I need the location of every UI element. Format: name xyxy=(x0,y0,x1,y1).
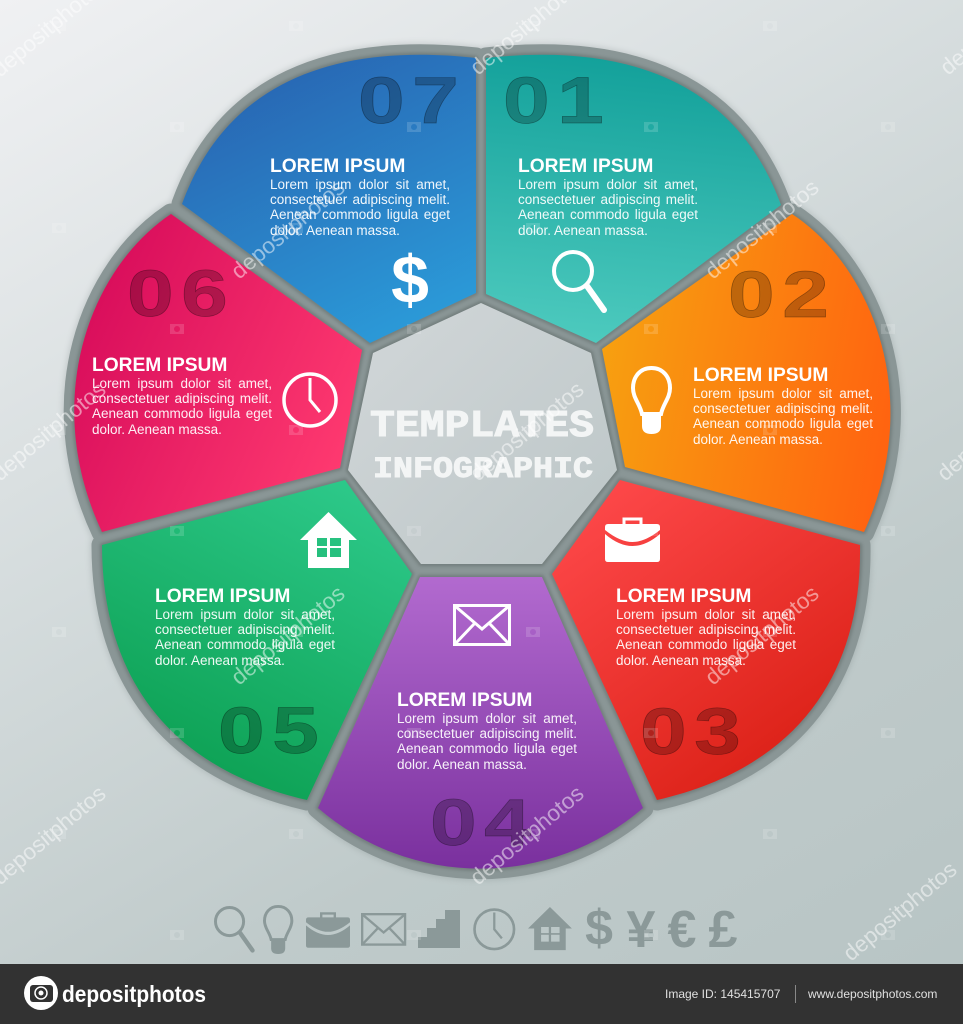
footer bar xyxy=(0,964,963,1024)
text block 07: consectetuer adipiscing melit. xyxy=(270,192,450,207)
text block 01: LOREM IPSUM xyxy=(518,156,653,177)
text block 03: Lorem ipsum dolor sit amet, xyxy=(616,607,796,622)
text block 02: Lorem ipsum dolor sit amet, xyxy=(693,386,873,401)
image id: Image ID: 145415707 xyxy=(665,987,781,1001)
text block 06: dolor. Aenean massa. xyxy=(92,422,222,437)
panel: centre heptagon with title xyxy=(348,303,617,564)
currency icons: £ xyxy=(709,901,738,959)
logo wordmark: depositphotos xyxy=(62,981,206,1007)
watermarks: depositphotos xyxy=(838,857,962,966)
currency icons: € xyxy=(668,901,696,959)
icon: briefcase xyxy=(605,519,660,562)
icon: light bulb xyxy=(633,368,670,434)
text block 02: Aenean commodo ligula eget xyxy=(693,416,873,431)
text block 01 xyxy=(518,156,698,238)
icon: stairs grey xyxy=(418,910,460,948)
icon: clock xyxy=(284,374,336,426)
icon: dollar: $ xyxy=(391,242,429,318)
text block 01: Lorem ipsum dolor sit amet, xyxy=(518,177,698,192)
watermarks: depositphotos xyxy=(226,581,350,690)
text block 03 xyxy=(616,586,796,668)
icon: envelope grey xyxy=(362,914,405,945)
text block 07: Aenean commodo ligula eget xyxy=(270,207,450,222)
icon row xyxy=(215,900,738,959)
panel: segment 05 green xyxy=(102,480,412,800)
text block 01: Aenean commodo ligula eget xyxy=(518,207,698,222)
currency icons: ¥ xyxy=(627,901,656,959)
text block 06: Lorem ipsum dolor sit amet, xyxy=(92,376,272,391)
number 01: 01 xyxy=(503,64,611,137)
number 03: 03 xyxy=(640,695,748,768)
icon: magnifier xyxy=(554,252,604,310)
text block 07: LOREM IPSUM xyxy=(270,156,405,177)
title xyxy=(370,405,594,487)
text block 05 xyxy=(155,586,335,668)
text block 07: Lorem ipsum dolor sit amet, xyxy=(270,177,450,192)
panel: segment 02 orange xyxy=(602,214,890,532)
text block 06: consectetuer adipiscing melit. xyxy=(92,391,272,406)
text block 04: LOREM IPSUM xyxy=(397,690,532,711)
watermarks: depositphotos xyxy=(465,781,589,890)
icon: house xyxy=(300,512,357,568)
panel: segment 07 blue xyxy=(182,55,476,343)
text block 05: consectetuer adipiscing melit. xyxy=(155,622,335,637)
text block 05: Lorem ipsum dolor sit amet, xyxy=(155,607,335,622)
title: INFOGRAPHIC xyxy=(373,453,593,487)
title: TEMPLATES xyxy=(370,405,594,448)
text block 05: Aenean commodo ligula eget xyxy=(155,637,335,652)
text block 06: Aenean commodo ligula eget xyxy=(92,406,272,421)
text block 07: dolor. Aenean massa. xyxy=(270,223,400,238)
watermarks: depositphotos xyxy=(465,377,589,486)
watermarks: depositphotos xyxy=(700,175,824,284)
icon: bulb grey xyxy=(264,906,292,954)
number 02: 02 xyxy=(728,258,836,331)
logo camera icon xyxy=(24,976,58,1010)
number 07: 07 xyxy=(358,64,466,137)
watermarks: depositphotos xyxy=(226,175,350,284)
text block 01: dolor. Aenean massa. xyxy=(518,223,648,238)
text block 03: consectetuer adipiscing melit. xyxy=(616,622,796,637)
text block 03: dolor. Aenean massa. xyxy=(616,653,746,668)
panel: background frame of the segmented ring xyxy=(74,55,890,869)
currency icons: $ xyxy=(585,900,613,956)
text block 05: dolor. Aenean massa. xyxy=(155,653,285,668)
text block 02 xyxy=(693,365,873,447)
text block 03: Aenean commodo ligula eget xyxy=(616,637,796,652)
icon: briefcase grey xyxy=(306,913,350,948)
text block 02: dolor. Aenean massa. xyxy=(693,432,823,447)
text block 04: consectetuer adipiscing melit. xyxy=(397,726,577,741)
panel: segment 04 purple xyxy=(318,577,643,869)
number 05: 05 xyxy=(218,694,326,767)
icon: envelope xyxy=(454,606,510,644)
number 04: 04 xyxy=(430,786,538,859)
currency icons xyxy=(585,900,738,959)
site url: www.depositphotos.com xyxy=(807,987,937,1001)
icon: house grey xyxy=(528,907,572,950)
icon: clock grey xyxy=(475,910,514,949)
text block 05: LOREM IPSUM xyxy=(155,586,290,607)
icon: magnifier grey xyxy=(215,907,252,950)
text block 06: LOREM IPSUM xyxy=(92,355,227,376)
text block 06 xyxy=(92,355,272,437)
text block 04: dolor. Aenean massa. xyxy=(397,757,527,772)
text block 02: LOREM IPSUM xyxy=(693,365,828,386)
watermarks: depositphotos xyxy=(700,581,824,690)
number 06: 06 xyxy=(127,257,235,330)
text block 02: consectetuer adipiscing melit. xyxy=(693,401,873,416)
text block 03: LOREM IPSUM xyxy=(616,586,751,607)
text block 04: Aenean commodo ligula eget xyxy=(397,741,577,756)
text block 04 xyxy=(397,690,577,772)
panel: segment 03 red xyxy=(552,480,860,800)
text block 07 xyxy=(270,156,450,238)
panel: segment 06 pink xyxy=(74,214,362,532)
panel: segment 01 teal xyxy=(486,55,781,343)
text block 04: Lorem ipsum dolor sit amet, xyxy=(397,711,577,726)
text block 01: consectetuer adipiscing melit. xyxy=(518,192,698,207)
